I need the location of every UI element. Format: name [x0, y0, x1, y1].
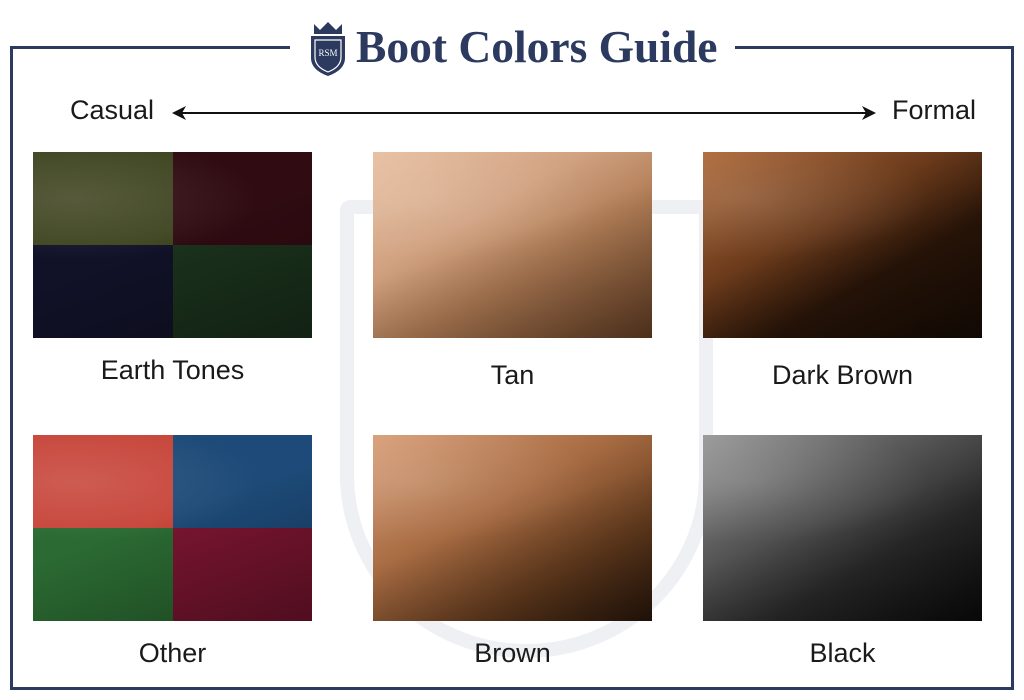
label formal: Formal — [892, 95, 976, 125]
label brown: Brown — [474, 638, 551, 668]
swatch: dark brown — [703, 152, 982, 338]
logo shield: RSM — [318, 48, 338, 58]
watermark shield — [340, 200, 713, 658]
swatch: brown — [373, 435, 652, 621]
title: Boot Colors Guide — [356, 21, 718, 72]
title gap — [290, 30, 735, 60]
label tan: Tan — [491, 360, 534, 390]
label black: Black — [809, 638, 876, 668]
label earth tones: Earth Tones — [101, 355, 244, 385]
swatch: black — [703, 435, 982, 621]
swatch: tan — [373, 152, 652, 338]
logo shield — [311, 22, 345, 76]
swatch: earth tones — [33, 152, 312, 338]
arrow casual to formal — [172, 106, 876, 120]
swatch: other — [33, 435, 312, 621]
label casual: Casual — [70, 95, 154, 125]
label dark brown: Dark Brown — [772, 360, 913, 390]
label other: Other — [139, 638, 206, 668]
